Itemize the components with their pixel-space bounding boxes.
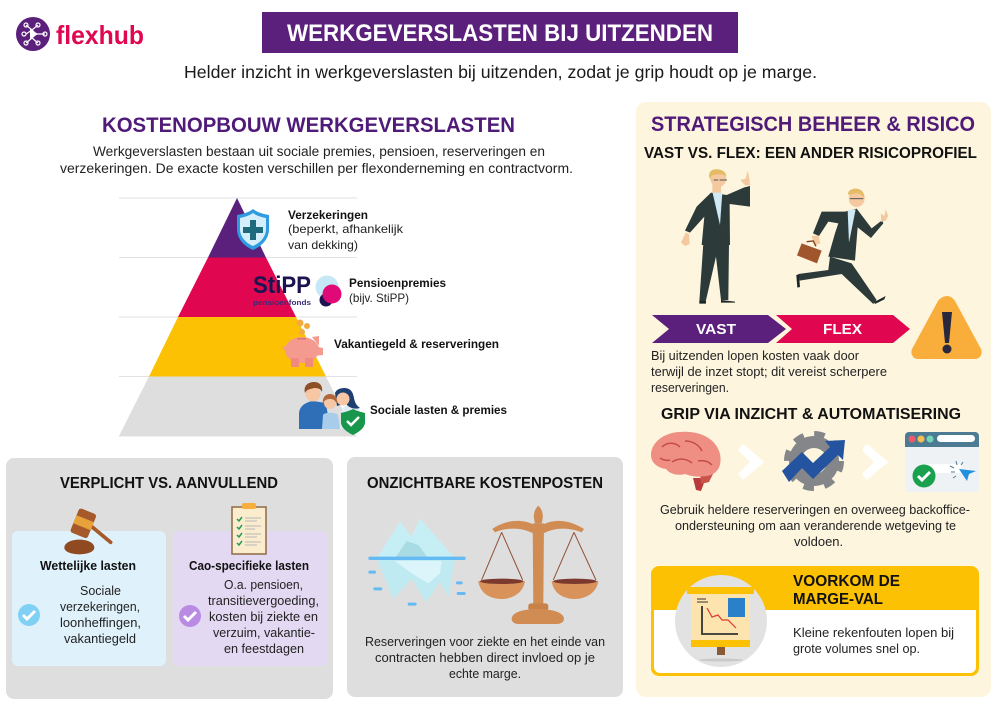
callout title <box>793 573 900 608</box>
panel: verplicht vs. aanvullend <box>6 458 333 699</box>
logo: StiPP pensioenfonds: pensioenfonds <box>253 298 311 307</box>
arrow: vast <box>652 315 786 343</box>
icon: warning triangle <box>911 296 982 359</box>
icon: browser window <box>905 432 979 492</box>
intro text: verzekeringen. De exacte kosten verschillen per flexonderneming en contractvorm. <box>60 161 573 176</box>
label: verzekeringen: Verzekeringen <box>288 210 368 222</box>
icon: family <box>299 382 365 435</box>
text: gebruik: ondersteuning om aan veranderende wetgeving te <box>675 518 956 533</box>
panel: kostenopbouw <box>60 113 573 436</box>
label: sociale lasten: Sociale lasten & premies <box>370 405 507 417</box>
arrow: vast: VAST <box>696 322 736 338</box>
heading: kostenopbouw: KOSTENOPBOUW WERKGEVERSLASTEN <box>102 113 515 137</box>
callout text <box>793 625 954 656</box>
card text: loonheffingen, <box>60 615 141 630</box>
logo: flexhub <box>16 17 144 51</box>
card title: Cao-specifieke lasten <box>189 559 309 573</box>
icon: iceberg <box>368 518 466 606</box>
icon: gavel <box>64 508 111 554</box>
arrow: flex <box>776 315 910 343</box>
card text <box>60 583 141 646</box>
arrow: flex: FLEX <box>823 322 862 338</box>
card text: O.a. pensioen, <box>224 577 303 592</box>
icon: check <box>179 605 201 627</box>
panel text <box>365 634 605 681</box>
card text <box>208 577 319 656</box>
pyramid chart <box>119 198 357 436</box>
panel text: contracten hebben direct invloed op je <box>375 650 595 665</box>
callout text: grote volumes snel op. <box>793 641 920 656</box>
icon: gear with arrow <box>782 434 845 488</box>
card: cao-specifieke lasten <box>173 503 327 666</box>
text: uitzenden <box>651 348 887 395</box>
subheading: grip: GRIP VIA INZICHT & AUTOMATISERING <box>661 406 961 423</box>
arrow: chevron <box>864 446 886 478</box>
label: vakantiegeld: Vakantiegeld & reserveringen <box>334 339 499 351</box>
text: gebruik: Gebruik heldere reserveringen en overweeg backoffice- <box>660 502 970 517</box>
panel: strategisch beheer <box>636 102 991 697</box>
title: WERKGEVERSLASTEN BIJ UITZENDEN <box>287 20 713 47</box>
icon: chart board <box>675 575 767 667</box>
subtitle: Helder inzicht in werkgeverslasten bij uitzenden, zodat je grip houdt op je marge. <box>184 62 817 82</box>
icon: scales <box>478 506 598 624</box>
text: gebruik <box>660 502 970 549</box>
title <box>262 12 738 53</box>
label: verzekeringen: van dekking) <box>288 238 358 252</box>
callout title: VOORKOM DE <box>793 573 900 590</box>
label: verzekeringen <box>288 210 404 252</box>
card text: vakantiegeld <box>64 631 136 646</box>
callout title: MARGE-VAL <box>793 591 883 608</box>
card text: verzuim, vakantie- <box>213 625 315 640</box>
text: uitzenden: terwijl de inzet stopt; dit vereist scherpere <box>651 364 887 379</box>
card text: verzekeringen, <box>60 599 140 614</box>
panel: onzichtbare kostenposten <box>347 457 623 697</box>
panel text: echte marge. <box>449 666 521 681</box>
icon: shield <box>237 209 269 250</box>
logo: StiPP pensioenfonds: StiPP <box>253 272 311 299</box>
heading: onzichtbare: ONZICHTBARE KOSTENPOSTEN <box>367 475 603 492</box>
card title: Wettelijke lasten <box>40 559 136 573</box>
text: uitzenden: Bij uitzenden lopen kosten vaak door <box>651 348 860 363</box>
card: wettelijke lasten <box>12 508 166 666</box>
text: uitzenden: reserveringen. <box>651 380 729 395</box>
intro text <box>60 144 573 176</box>
label: verzekeringen: (beperkt, afhankelijk <box>288 222 404 236</box>
icon: piggy bank <box>282 320 323 367</box>
icon: check <box>18 604 40 626</box>
label: pensioenpremies <box>349 278 446 305</box>
text: gebruik: voldoen. <box>794 534 843 549</box>
card text: transitievergoeding, <box>208 593 319 608</box>
intro text: Werkgeverslasten bestaan uit sociale premies, pensioen, reserveringen en <box>93 144 545 159</box>
subheading: vast vs flex: VAST VS. FLEX: EEN ANDER RISICOPROFIEL <box>644 145 977 162</box>
label: pensioenpremies: Pensioenpremies <box>349 278 446 290</box>
panel text: Reserveringen voor ziekte en het einde van <box>365 634 605 649</box>
heading: verplicht: VERPLICHT VS. AANVULLEND <box>60 475 278 492</box>
logo: flexhub: flexhub <box>56 20 144 50</box>
callout text: Kleine rekenfouten lopen bij <box>793 625 954 640</box>
icon: brain <box>651 432 721 491</box>
card text: kosten bij ziekte en <box>209 609 318 624</box>
card text: en feestdagen <box>224 641 304 656</box>
label: pensioenpremies: (bijv. StiPP) <box>349 291 409 305</box>
heading: strategisch: STRATEGISCH BEHEER & RISICO <box>651 113 975 136</box>
icon: clipboard <box>232 503 266 554</box>
callout: voorkom de marge-val <box>651 566 979 676</box>
illustration: standing man <box>681 169 750 304</box>
card text: Sociale <box>80 583 121 598</box>
illustration: running man <box>796 189 888 304</box>
arrow: chevron <box>740 446 762 478</box>
logo: StiPP pensioenfonds <box>253 272 342 307</box>
